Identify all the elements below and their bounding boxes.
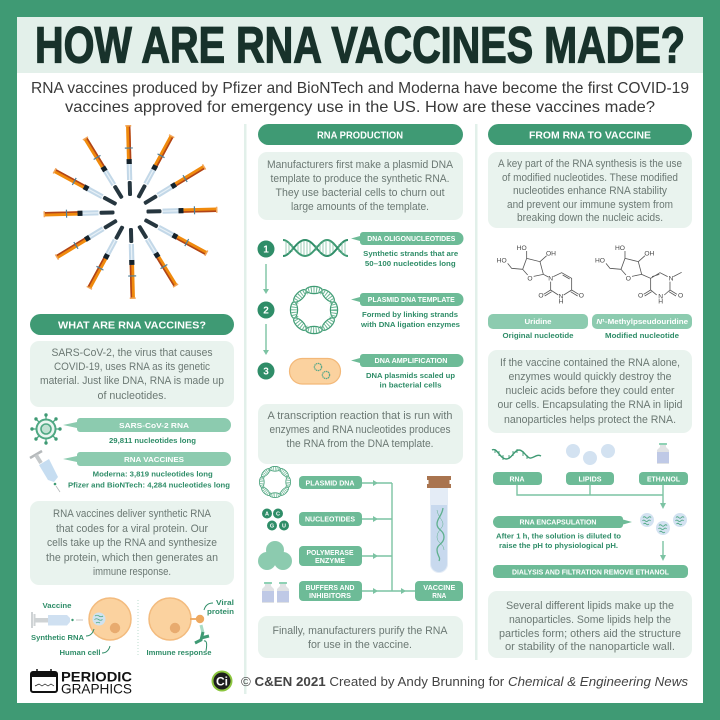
molecule: uridine: HO — [517, 245, 527, 252]
panel: lipid nanoparticles protection: our cells. Encapsulating the RNA in lipid — [498, 399, 682, 411]
diagram: immune response: Viral — [216, 598, 234, 607]
logo: Periodic Graphics — [31, 668, 132, 696]
icon: nucleotides: G — [270, 524, 274, 530]
heading: RNA production — [258, 124, 463, 145]
molecule: uridine: N — [548, 275, 553, 282]
label: N1-methylpseudouridine — [592, 314, 692, 340]
callout: DNA oligonucleotides — [351, 232, 464, 268]
icon: nucleotides: A — [265, 512, 269, 518]
molecule: uridine: H — [559, 298, 564, 305]
heading: RNA production: RNA PRODUCTION — [317, 130, 403, 142]
step numbers and arrows — [258, 240, 274, 380]
diagram: immune response: protein — [207, 607, 235, 616]
icon: virus — [30, 413, 62, 445]
molecule: N1-methylpseudouridine: N — [669, 275, 674, 282]
panel: modified nucleotides: of modified nucleotides. These modified — [502, 172, 678, 184]
step numbers and arrows: 1 — [263, 244, 269, 256]
callout: RNA vaccines: Moderna: 3,819 nucleotides long — [93, 470, 213, 478]
panel: plasmid template: large amounts of the template. — [291, 201, 429, 213]
flow labels: ingredients: INHIBITORS — [309, 591, 351, 600]
panel: modified nucleotides: and prevent our immune system from — [507, 199, 673, 211]
panel: how RNA vaccines work: that codes for a viral protein. Our — [56, 523, 208, 535]
label: vaccine RNA: RNA — [432, 591, 447, 600]
label: uridine: Original nucleotide — [502, 331, 574, 340]
callout: plasmid DNA template: with DNA ligation enzymes — [360, 320, 460, 329]
diagram: vaccine enters human cell: Vaccine — [42, 601, 72, 610]
panel: lipid nanoparticles protection: If the vaccine contained the RNA alone, — [500, 357, 680, 369]
label: N1-methylpseudouridine: N¹-Methylpseudouridine — [596, 317, 688, 326]
panel: how RNA vaccines work: the protein, which then generates an — [46, 552, 218, 564]
panel: how RNA vaccines work: cells take up the RNA and synthesize — [47, 537, 217, 549]
icon: polymerase enzyme — [258, 541, 292, 570]
panel: how RNA vaccines work — [30, 501, 234, 585]
flow arrow: merge — [517, 485, 666, 509]
icon: small plasmid — [259, 466, 291, 498]
panel: how RNA vaccines work: RNA vaccines deliver synthetic RNA — [53, 508, 212, 520]
callout: RNA encapsulation: After 1 h, the solution is diluted to — [496, 532, 622, 540]
label: N1-methylpseudouridine: Modified nucleotide — [605, 331, 679, 340]
molecule: uridine: N — [559, 293, 564, 300]
flow labels: RNA, lipids, ethanol: LIPIDS — [578, 474, 602, 484]
logo: CI: Ci — [216, 674, 228, 688]
label: dialysis and filtration — [493, 565, 688, 578]
callout: RNA vaccines: Pfizer and BioNTech: 4,284 nucleotides long — [68, 480, 230, 490]
icon: syringe — [30, 451, 60, 492]
panel: lipid nanoparticles protection: nucleic acids before they could enter — [506, 385, 675, 397]
callout: plasmid DNA template: Formed by linking strands — [362, 310, 458, 319]
panel: modified nucleotides: A key part of the RNA synthesis is the use — [498, 158, 682, 170]
callout: plasmid DNA template: PLASMID DNA TEMPLATE — [368, 295, 455, 304]
panel: RNA genetic material: COVID-19, uses RNA as its genetic — [54, 361, 210, 373]
icon: test tube — [427, 476, 451, 573]
icon: buffer vials — [262, 582, 289, 603]
panel: lipids function — [488, 591, 692, 658]
panel: transcription reaction: the RNA from the DNA template. — [286, 438, 434, 450]
callout: RNA encapsulation: RNA ENCAPSULATION — [520, 518, 596, 527]
icon: plasmid — [290, 286, 338, 334]
callout: SARS-CoV-2 RNA: 29,811 nucleotides long — [109, 436, 197, 445]
heading: what are RNA vaccines: WHAT ARE RNA VACCINES? — [58, 320, 206, 332]
callout: DNA amplification — [351, 354, 464, 390]
flow labels: ingredients: NUCLEOTIDES — [305, 515, 355, 524]
panel: lipid nanoparticles protection — [488, 350, 692, 433]
panel: RNA genetic material — [30, 341, 234, 407]
panel: RNA genetic material: SARS-CoV-2, the virus that causes — [52, 347, 213, 359]
molecule: uridine: HO — [497, 258, 507, 265]
molecule: uridine: O — [527, 275, 533, 282]
step numbers and arrows: 2 — [263, 306, 269, 316]
heading: from RNA to vaccine: FROM RNA TO VACCINE — [529, 130, 651, 142]
panel: transcription reaction: A transcription reaction that is run with — [268, 410, 452, 422]
panel: transcription reaction — [258, 404, 463, 464]
molecule: N1-methylpseudouridine: OH — [644, 250, 655, 257]
heading: what are RNA vaccines — [30, 314, 234, 335]
callout: RNA encapsulation: raise the pH to physiological pH. — [499, 541, 618, 550]
icon: bacterial cell — [290, 358, 340, 384]
panel: purification: for use in the vaccine. — [308, 639, 412, 651]
label: dialysis and filtration: DIALYSIS AND FILTRATION REMOVE ETHANOL — [512, 568, 669, 576]
panel: RNA genetic material: of nucleotides. — [98, 390, 166, 402]
flow labels: ingredients: POLYMERASE — [306, 548, 354, 557]
callout: RNA encapsulation — [493, 516, 632, 550]
arrow: to dialysis — [660, 541, 666, 561]
panel: lipids function: particles form; others aid the structure — [499, 628, 681, 640]
icon: RNA strand — [492, 449, 541, 460]
logo: Periodic Graphics: GRAPHICS — [61, 680, 132, 696]
panel: transcription reaction: enzymes and RNA nucleotides produces — [270, 424, 451, 436]
callout: DNA oligonucleotides: DNA OLIGONUCLEOTIDES — [367, 234, 455, 243]
icon: nucleotides: C — [276, 512, 280, 518]
panel: modified nucleotides: nucleotides enhance RNA stability — [513, 185, 667, 197]
flow labels: RNA, lipids, ethanol — [493, 472, 688, 485]
molecule: N1-methylpseudouridine: HO — [595, 258, 605, 265]
diagram: vaccine enters human cell: Synthetic RNA — [31, 633, 85, 642]
label: uridine: Uridine — [524, 317, 552, 326]
flow labels: ingredients: PLASMID DNA — [306, 478, 355, 488]
flow labels: RNA, lipids, ethanol: RNA — [510, 474, 525, 484]
icon: DNA helix — [283, 240, 348, 256]
panel: lipid nanoparticles protection: enzymes would quickly destroy the — [508, 371, 672, 383]
flow labels: ingredients — [299, 476, 362, 601]
flow labels: ingredients: BUFFERS AND — [306, 583, 355, 592]
molecule: N1-methylpseudouridine: O — [638, 293, 643, 300]
molecule: uridine: OH — [546, 250, 556, 257]
intro text: RNA vaccines produced by Pfizer and BioNTech and Moderna have become the first COVID-19 — [31, 80, 689, 97]
heading: from RNA to vaccine — [488, 124, 692, 145]
intro text: vaccines approved for emergency use in the US. How are these vaccines made? — [65, 99, 655, 116]
panel: lipid nanoparticles protection: nanoparticles helps protect the RNA. — [504, 414, 676, 426]
molecule: uridine — [497, 245, 584, 305]
panel: plasmid template: Manufacturers first make a plasmid DNA — [267, 159, 454, 171]
panel: modified nucleotides: breaking down the nucleic acids. — [517, 212, 663, 224]
diagram: immune response: Immune response — [146, 648, 212, 657]
callout: DNA amplification: DNA AMPLIFICATION — [374, 356, 448, 365]
icon: nucleotides: U — [282, 524, 286, 530]
logo: Periodic Graphics: PERIODIC — [61, 668, 132, 684]
callout: DNA oligonucleotides: 50–100 nucleotides long — [365, 259, 456, 268]
callout: plasmid DNA template — [351, 293, 464, 329]
panel: modified nucleotides — [488, 152, 692, 228]
callout: DNA amplification: in bacterial cells — [380, 380, 442, 390]
molecule: N1-methylpseudouridine: H — [658, 298, 663, 305]
label: vaccine RNA: VACCINE — [423, 583, 455, 592]
intro text — [31, 80, 689, 116]
logo: CI — [212, 670, 232, 692]
panel: purification: Finally, manufacturers purify the RNA — [272, 625, 448, 637]
icon: ethanol vial — [657, 443, 669, 464]
panel: plasmid template: template to produce the synthetic RNA. — [270, 173, 450, 185]
callout: DNA amplification: DNA plasmids scaled up — [366, 371, 455, 380]
flow labels: ingredients: ENZYME — [315, 556, 345, 565]
molecule: uridine: O — [579, 293, 584, 300]
molecule: N1-methylpseudouridine: O — [626, 275, 631, 282]
diagram: immune response — [138, 598, 235, 657]
icon: nanoparticles — [640, 513, 687, 535]
panel: plasmid template — [258, 152, 463, 220]
callout: SARS-CoV-2 RNA: SARS-CoV-2 RNA — [119, 421, 190, 430]
panel: purification — [258, 616, 463, 658]
flow arrows to vaccine RNA — [362, 480, 415, 594]
panel: plasmid template: They use bacterial cells to churn out — [276, 187, 444, 199]
callout: RNA vaccines — [63, 452, 231, 490]
panel: lipids function: nanoparticles. Some lipids help the — [509, 614, 671, 626]
callout: RNA vaccines: RNA VACCINES — [124, 455, 184, 464]
callout: SARS-CoV-2 RNA — [63, 418, 231, 445]
step numbers and arrows: 3 — [263, 366, 269, 378]
molecule: N1-methylpseudouridine: HO — [615, 245, 625, 252]
callout: DNA oligonucleotides: Synthetic strands that are — [363, 249, 458, 258]
icon: lipids — [566, 444, 615, 465]
panel: lipids function: or stability of the nanoparticle wall. — [505, 641, 675, 653]
molecule: N1-methylpseudouridine — [595, 245, 683, 305]
panel: RNA genetic material: material. Just like DNA, RNA is made up — [40, 375, 224, 387]
illustration: ring of syringes — [43, 125, 218, 299]
molecule: N1-methylpseudouridine: O — [678, 293, 683, 300]
molecule: uridine: O — [538, 293, 544, 300]
column dividers — [244, 124, 478, 694]
panel: how RNA vaccines work: immune response. — [93, 566, 171, 578]
diagram: vaccine enters human cell — [31, 598, 131, 657]
label: uridine — [488, 314, 588, 340]
diagram: vaccine enters human cell: Human cell — [60, 648, 100, 657]
panel: lipids function: Several different lipids make up the — [506, 600, 674, 612]
icon: nucleotides — [262, 508, 289, 530]
footer credit: © C&EN 2021 Created by Andy Brunning for Chemical & Engineering News — [241, 674, 689, 689]
label: vaccine RNA — [415, 581, 463, 601]
flow labels: RNA, lipids, ethanol: ETHANOL — [647, 474, 680, 484]
molecule: N1-methylpseudouridine: N — [658, 293, 663, 300]
